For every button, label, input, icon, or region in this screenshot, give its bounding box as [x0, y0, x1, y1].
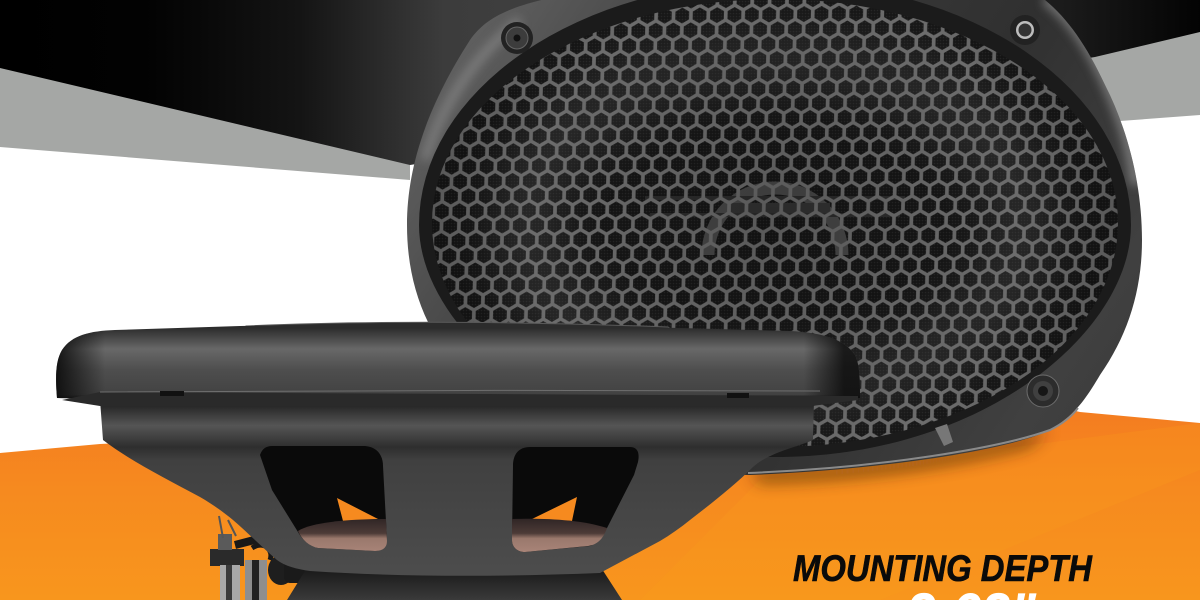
screw bottom-right [1027, 375, 1059, 407]
grille lattice [425, 0, 1125, 455]
caption label: MOUNTING DEPTH [793, 548, 1093, 589]
wiring terminals [210, 516, 314, 600]
screw top-left [501, 22, 533, 54]
screw top-right [1010, 15, 1040, 45]
background: orange floor [0, 400, 1200, 600]
rear speaker shadow [750, 428, 1050, 482]
grille edge on top of flange [234, 322, 680, 336]
rear speaker rim highlight [425, 0, 1136, 185]
background: grey diagonal band [0, 25, 1200, 180]
flange underside lip [62, 392, 858, 406]
mounting depth caption [793, 548, 1093, 600]
front speaker side view [56, 322, 860, 600]
grille centre logo [645, 188, 905, 255]
rear speaker hexagonal grille [425, 0, 1125, 455]
background: black top band [0, 0, 1200, 165]
magnet assembly [287, 566, 622, 600]
left basket window [260, 446, 387, 551]
right basket window [512, 447, 639, 552]
rear speaker bottom tab [935, 424, 953, 446]
rear speaker [407, 0, 1142, 482]
rear speaker bottom lip [748, 408, 1078, 473]
flange [56, 324, 860, 406]
flange notches [160, 391, 184, 396]
grille inner cone reflection [525, 60, 1025, 390]
rear speaker inner trough [419, 0, 1131, 457]
basket [100, 400, 814, 576]
rear speaker outer frame [407, 0, 1142, 475]
